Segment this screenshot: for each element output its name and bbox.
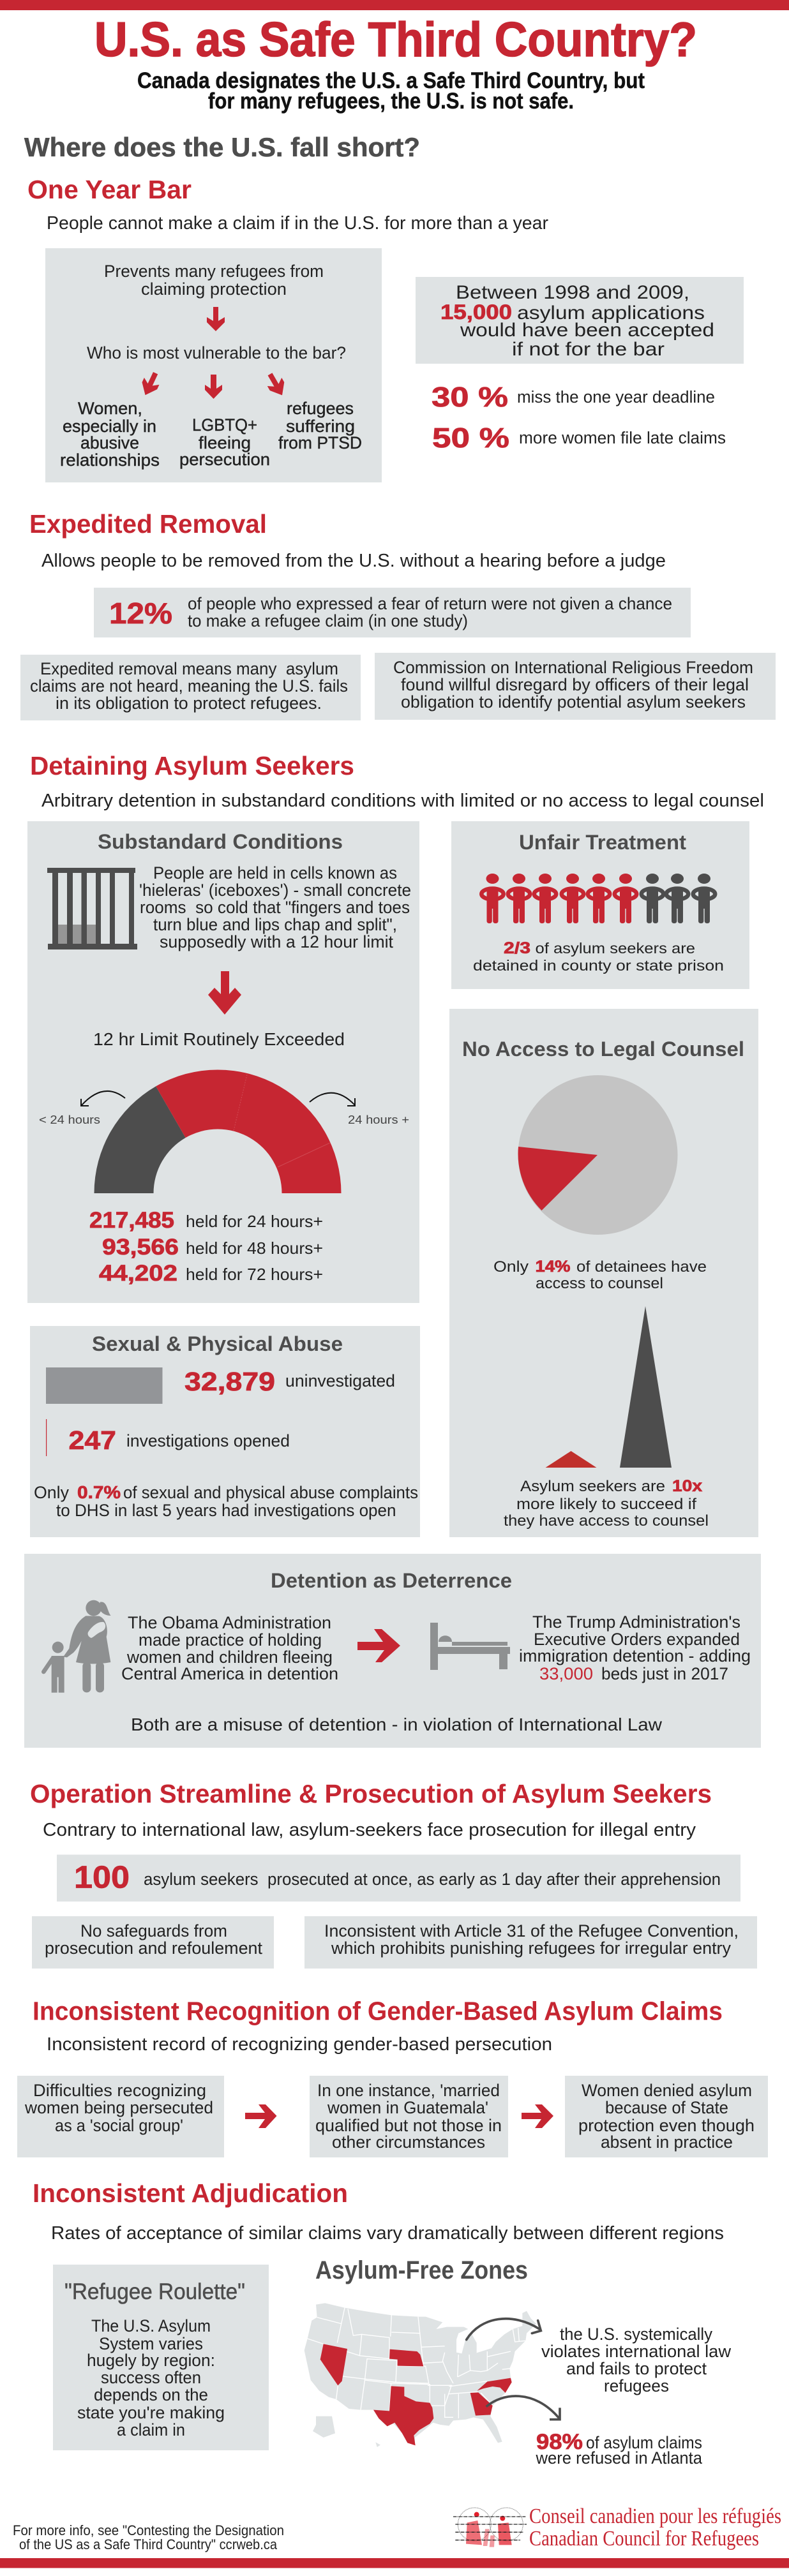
panel heading: Substandard Conditions (98, 830, 343, 853)
text: Trump administration: beds just in 2017 (601, 1664, 728, 1683)
text: hieleras: rooms so cold that "fingers and toes (140, 898, 410, 917)
map: United States (304, 2303, 560, 2447)
arrow: right 2 (522, 2104, 553, 2128)
panel: women denied asylum: protection even though (578, 2116, 755, 2135)
panel: commission finding: Commission on International Religious Freedom (393, 658, 753, 677)
panel: no safeguards (32, 1916, 274, 1969)
heading: where does the U.S. fall short: Where does the U.S. fall short? (24, 132, 420, 162)
text: prosecution summary: Contrary to international law, asylum-seekers face prosecution for illegal entry (43, 1820, 696, 1840)
panel: married women in Guatemala: other circumstances (332, 2133, 485, 2152)
footer text: For more info, see "Contesting the Designation (13, 2522, 284, 2538)
stats: hours held: 44,202 (99, 1261, 177, 1286)
text: 0.7 percent: to DHS in last 5 years had investigations open (56, 1501, 396, 1520)
text: roulette body: The U.S. Asylum (91, 2316, 211, 2335)
text: hieleras: turn blue and lips chap and split", (153, 915, 397, 934)
icon row: grey people (642, 874, 715, 923)
panel: no safeguards: No safeguards from (80, 1921, 227, 1940)
text: roulette body: state you're making (77, 2403, 225, 2422)
text: refugees with PTSD: refugees (287, 399, 354, 418)
label: less than 24 hours: < 24 hours (39, 1113, 100, 1126)
panel: married women in Guatemala (310, 2076, 508, 2157)
stat: investigations opened: investigations opened (126, 1431, 290, 1450)
text: refugees with PTSD: from PTSD (278, 433, 362, 452)
arrow: down left (138, 369, 163, 399)
text: 14 percent (493, 1258, 707, 1292)
text: 10x (504, 1477, 709, 1530)
text: misuse of detention: Both are a misuse of detention - in violation of International Law (131, 1715, 662, 1734)
stat: 50 percent (432, 422, 726, 454)
panel: commission finding: found willful disregard by officers of their legal (401, 675, 749, 694)
text: women (60, 399, 160, 470)
text: roulette body: System varies (99, 2334, 203, 2353)
heading: Inconsistent Recognition: Inconsistent Recognition of Gender-Based Asylum Claims (33, 1996, 723, 2025)
arrow: to Atlanta text (486, 2396, 560, 2420)
panel: social group (17, 2076, 224, 2157)
footer text: of the US as a Safe Third Country" ccrweb.ca (19, 2536, 278, 2552)
text: hieleras: 'hieleras' (iceboxes') - small concrete (139, 881, 411, 900)
text: Trump administration (519, 1612, 751, 1683)
text: Obama administration: Central America in detention (121, 1664, 338, 1683)
text: Obama administration: The Obama Administration (128, 1613, 331, 1632)
panel: article 31: Inconsistent with Article 31 of the Refugee Convention, (324, 1921, 739, 1940)
chart: pie (518, 1075, 678, 1235)
heading: Detaining Asylum Seekers: Detaining Asylum Seekers (30, 751, 354, 780)
text: 98 percent: 98% (536, 2430, 583, 2454)
stat: uninvestigated: 32,879 (184, 1367, 275, 1396)
text: LGBTQ+: persecution (179, 450, 270, 469)
stat: 50 percent: 50 % (432, 422, 509, 454)
panel heading: Unfair Treatment (519, 831, 686, 854)
text: Obama administration: made practice of holding (139, 1630, 322, 1649)
text: systemic violations: the U.S. systemically (560, 2325, 713, 2344)
panel: 100 asylum seekers (57, 1854, 740, 1902)
text: who is most vulnerable: Who is most vulnerable to the bar? (87, 343, 346, 362)
text: prevents many refugees (104, 262, 324, 299)
panel: married women in Guatemala: In one instance, 'married (317, 2081, 500, 2100)
panel: 15,000 applications: 15,000 (440, 301, 512, 324)
panel: married women in Guatemala: women in Guatemala' (327, 2098, 488, 2117)
text: roulette body: hugely by region: (87, 2351, 215, 2370)
stat: investigations opened (69, 1426, 290, 1455)
stats: hours held (89, 1208, 323, 1286)
text: women: Women, (78, 399, 142, 418)
subtitle: for many refugees, the U.S. is not safe. (208, 89, 574, 114)
panel: sexual and physical abuse (30, 1326, 420, 1537)
panel: detention as deterrence (24, 1554, 761, 1748)
text: 0.7 percent: of sexual and physical abuse complaints (123, 1483, 418, 1502)
text: 98 percent: of asylum claims (586, 2433, 702, 2452)
panel: 12 percent: 12% (109, 597, 172, 630)
arrow: right 1 (245, 2104, 277, 2128)
panel: 12 percent: of people who expressed a fear of return were not given a chance (188, 594, 672, 613)
panel: social group: as a 'social group' (55, 2116, 183, 2135)
state: Georgia (470, 2392, 493, 2416)
panel: no safeguards: prosecution and refoulement (45, 1939, 263, 1958)
text: two thirds: 2/3 (504, 939, 530, 957)
panel: 100 asylum seekers: asylum seekers prosecuted at once, as early as 1 day after their apprehension (144, 1870, 721, 1889)
text: one year bar summary: People cannot make a claim if in the U.S. for more than a year (47, 213, 548, 234)
panel: women denied asylum: absent in practice (601, 2133, 733, 2152)
text: 14 percent: access to counsel (536, 1275, 663, 1292)
panel: asylum claims not heard: Expedited removal means many asylum (40, 659, 338, 678)
stat: 50 percent: more women file late claims (519, 429, 726, 447)
text: hieleras (139, 863, 411, 951)
panel: women denied asylum (565, 2076, 768, 2157)
text: 98 percent: were refused in Atlanta (536, 2448, 702, 2468)
stat: 30 percent: miss the one year deadline (517, 389, 715, 406)
stat: investigations opened: 247 (69, 1426, 116, 1455)
stat: 30 percent: 30 % (432, 382, 508, 413)
text: 0.7 percent (34, 1482, 418, 1520)
text: Trump administration: Executive Orders expanded (534, 1630, 740, 1649)
panel: commission finding: obligation to identify potential asylum seekers (401, 692, 746, 711)
text: two thirds (473, 939, 724, 974)
panel heading: "Refugee Roulette" (64, 2279, 245, 2304)
text: 14 percent: Only (493, 1258, 529, 1276)
text: 10x: more likely to succeed if (516, 1496, 696, 1513)
bar: investigations opened (46, 1419, 47, 1456)
bar: uninvestigated (46, 1367, 162, 1404)
arrow: down (207, 307, 225, 331)
subtitle: Canada designates the U.S. a Safe Third Country, but (137, 68, 645, 93)
panel: married women in Guatemala: qualified but not those in (315, 2116, 502, 2135)
chart: half donut of hours held (94, 1069, 341, 1193)
stats: hours held: held for 48 hours+ (186, 1239, 323, 1258)
text: 14 percent: of detainees have (576, 1258, 707, 1276)
text: hieleras: supposedly with a 12 hour limit (160, 932, 394, 951)
panel: asylum claims not heard: in its obligation to protect refugees. (56, 694, 322, 713)
text: 10x: 10x (672, 1477, 702, 1495)
text: refugees with PTSD: suffering (286, 417, 355, 436)
panel: social group: Difficulties recognizing (33, 2081, 206, 2100)
text: expedited removal summary: Allows people to be removed from the U.S. without a hearing before a judge (41, 551, 666, 571)
stat: uninvestigated (184, 1367, 395, 1396)
arrow: to international law text (467, 2319, 541, 2340)
chart: triangle comparison (545, 1306, 672, 1468)
label: more than 24 hours: 24 hours + (348, 1113, 409, 1126)
arrow: down middle (205, 375, 222, 399)
panel: substandard conditions (27, 821, 419, 1303)
text: 0.7 percent: Only (34, 1483, 70, 1502)
heading: Inconsistent Adjudication: Inconsistent Adjudication (33, 2178, 348, 2208)
text: limit exceeded: 12 hr Limit Routinely Exceeded (93, 1029, 345, 1049)
text: women: abusive (80, 433, 139, 452)
panel: women denied asylum: because of State (605, 2098, 728, 2117)
text: roulette body: a claim in (117, 2420, 185, 2439)
panel: 12 percent (94, 588, 691, 637)
stats: hours held: held for 24 hours+ (186, 1212, 323, 1231)
panel: 15,000 applications: would have been accepted (460, 320, 714, 341)
icon: jail cell (47, 868, 137, 949)
panel: no access to legal counsel (449, 1009, 758, 1537)
panel: social group: women being persecuted (24, 2098, 213, 2117)
heading: Operation Streamline: Operation Streamline & Prosecution of Asylum Seekers (30, 1779, 712, 1808)
arrow: down (208, 971, 241, 1015)
stat: uninvestigated: uninvestigated (285, 1371, 395, 1390)
text: LGBTQ+: fleeing (199, 433, 251, 452)
text: 10x: they have access to counsel (504, 1512, 709, 1530)
panel: commission finding (375, 653, 776, 720)
panel: article 31: which prohibits punishing refugees for irregular entry (331, 1939, 732, 1958)
stat: 30 percent (432, 382, 715, 413)
arrow: right (357, 1629, 400, 1662)
text: Obama administration (121, 1613, 338, 1683)
footer text (13, 2522, 284, 2552)
arrow: down right (263, 370, 289, 399)
heading: Asylum-Free Zones: Asylum-Free Zones (315, 2256, 528, 2284)
text: Trump administration: immigration detention - adding (519, 1646, 751, 1665)
panel heading: No Access to Legal Counsel (462, 1038, 744, 1061)
text: refugees with PTSD (278, 399, 362, 452)
icon row: red people (481, 874, 636, 923)
text: Trump administration: 33,000 (539, 1664, 593, 1683)
panel: asylum claims not heard: claims are not heard, meaning the U.S. fails (30, 676, 348, 696)
state: Nebraska (389, 2349, 423, 2366)
panel: who is vulnerable (45, 248, 382, 482)
title: U.S. as Safe Third Country? (94, 13, 697, 67)
icon: bed (430, 1623, 510, 1670)
text: LGBTQ+: LGBTQ+ (192, 415, 257, 435)
text: detention summary: Arbitrary detention in substandard conditions with limited or no access to legal counsel (41, 791, 764, 811)
text: women: especially in (63, 417, 156, 436)
panel: article 31 (304, 1916, 757, 1969)
organization name (529, 2505, 781, 2550)
panel: 15,000 applications: if not for the bar (512, 339, 665, 360)
text: roulette body (77, 2316, 225, 2439)
state: Nevada (320, 2344, 347, 2385)
logo: globes, barbed wire and figures (453, 2508, 527, 2547)
arrow: less than 24 hours (81, 1091, 125, 1106)
panel: 12 percent: to make a refugee claim (in one study) (188, 611, 468, 630)
stats: hours held: 217,485 (89, 1208, 174, 1233)
panel: unfair treatment (451, 821, 749, 989)
text: systemic violations: violates international law (541, 2342, 732, 2361)
state: North Carolina (477, 2378, 512, 2393)
text: adjudication summary: Rates of acceptance of similar claims vary dramatically between different regions (51, 2223, 724, 2244)
text: LGBTQ+ (179, 415, 270, 469)
stats: hours held: 93,566 (102, 1235, 179, 1260)
state: Texas (373, 2386, 433, 2445)
subtitle (137, 68, 645, 114)
heading: Expedited Removal: Expedited Removal (29, 509, 267, 539)
heading: One Year Bar: One Year Bar (27, 175, 192, 204)
text: systemic violations: refugees (604, 2376, 669, 2395)
panel: 100 asylum seekers: 100 (74, 1861, 130, 1895)
text: prevents many refugees: Prevents many refugees from (104, 262, 324, 281)
text: roulette body: success often (101, 2368, 201, 2387)
panel: 15,000 applications (416, 277, 744, 364)
text: 14 percent: 14% (535, 1258, 571, 1276)
text: two thirds: of asylum seekers are (535, 940, 695, 957)
panel heading: Detention as Deterrence (271, 1569, 512, 1592)
text: Obama administration: women and children fleeing (126, 1648, 333, 1667)
panel: refugee roulette (53, 2265, 269, 2450)
text: 98 percent (536, 2430, 702, 2468)
text: two thirds: detained in county or state prison (473, 957, 724, 974)
arrow: more than 24 hours (310, 1093, 355, 1106)
text: women: relationships (60, 450, 160, 470)
bottom red bar (0, 2558, 789, 2568)
text: 0.7 percent: 0.7% (77, 1482, 121, 1502)
text: systemic violations: and fails to protect (566, 2359, 707, 2378)
text: Trump administration: The Trump Administration's (532, 1612, 740, 1632)
text: systemic violations (541, 2325, 732, 2395)
panel heading: Sexual & Physical Abuse (92, 1332, 343, 1355)
text: prevents many refugees: claiming protection (141, 279, 287, 299)
panel: women denied asylum: Women denied asylum (582, 2081, 752, 2100)
text: gender summary: Inconsistent record of recognizing gender-based persecution (47, 2034, 552, 2055)
stats: hours held: held for 72 hours+ (186, 1265, 323, 1284)
panel: asylum claims not heard (20, 655, 361, 720)
panel: 15,000 applications: asylum applications (517, 302, 705, 324)
top red bar (0, 0, 789, 10)
text: roulette body: depends on the (94, 2385, 208, 2404)
text: hieleras: People are held in cells known as (153, 863, 397, 882)
text: 10x: Asylum seekers are (520, 1478, 665, 1495)
icon: mother and children (43, 1600, 111, 1693)
panel: 15,000 applications: Between 1998 and 2009, (456, 282, 689, 303)
